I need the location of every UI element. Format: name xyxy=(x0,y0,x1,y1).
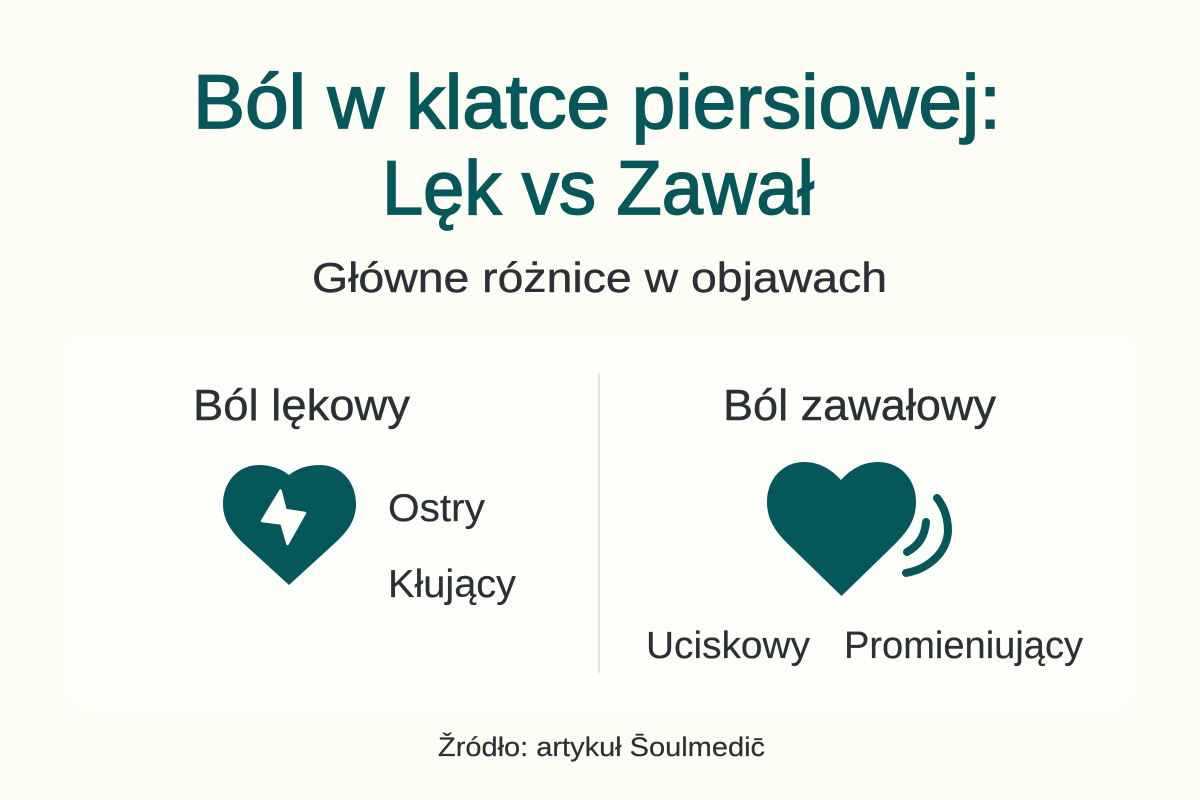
source note: Žródło: artykuł S̄oulmedic̄ xyxy=(438,731,765,762)
title: Ból w klatce piersiowej: xyxy=(193,60,1001,145)
subtitle: Główne różnice w objawach xyxy=(312,254,887,301)
icon: heart with lightning bolt xyxy=(223,465,356,585)
label: stabbing: Kłujący xyxy=(388,563,516,606)
label: pressing: Uciskowy xyxy=(646,625,810,667)
panel: comparison xyxy=(68,334,1132,708)
label: sharp: Ostry xyxy=(388,487,486,530)
title xyxy=(193,60,1001,231)
heading: anxiety pain: Ból lękowy xyxy=(193,381,410,430)
title: Lęk vs Zawał xyxy=(382,146,814,231)
label: radiating: Promieniujący xyxy=(844,625,1083,667)
icon: heart with radiating waves xyxy=(767,462,948,596)
heading: heart attack pain: Ból zawałowy xyxy=(723,381,996,430)
